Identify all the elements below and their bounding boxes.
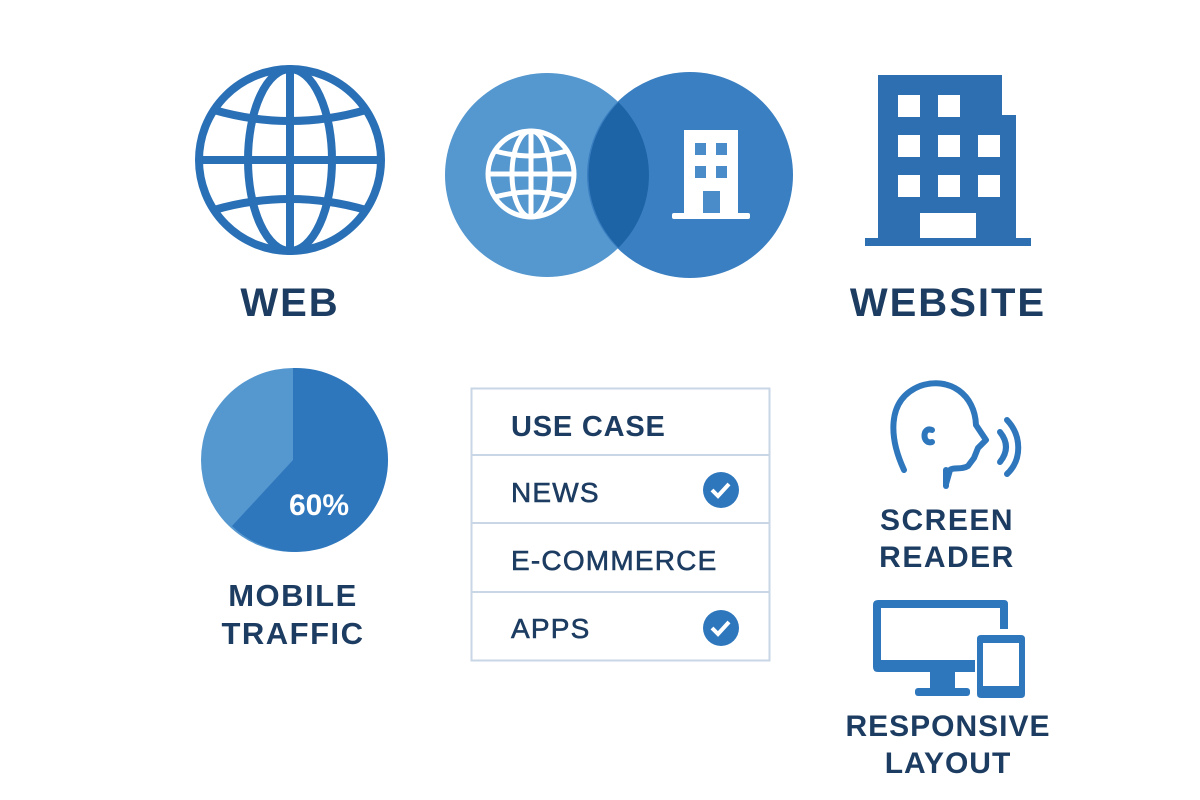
icon: small building xyxy=(672,130,750,219)
icon: small globe xyxy=(488,131,574,217)
label: SCREEN READER: SCREEN xyxy=(880,504,1014,537)
pie chart: 60% xyxy=(289,489,349,522)
heading: WEBSITE: WEBSITE xyxy=(850,281,1046,325)
label: MOBILE TRAFFIC: MOBILE xyxy=(228,578,358,613)
table: use cases: NEWS xyxy=(511,477,600,508)
table: use cases: APPS xyxy=(511,613,591,644)
label: MOBILE TRAFFIC: TRAFFIC xyxy=(221,616,365,651)
label: RESPONSIVE LAYOUT: LAYOUT xyxy=(885,747,1011,780)
pie chart xyxy=(201,368,388,552)
table: use cases: USE CASE xyxy=(511,411,666,443)
label: RESPONSIVE LAYOUT: RESPONSIVE xyxy=(845,710,1051,743)
icon: globe xyxy=(199,69,381,251)
heading: WEB: WEB xyxy=(240,281,340,325)
label: SCREEN READER: READER xyxy=(879,541,1015,574)
icon: check xyxy=(703,610,739,646)
table: use cases: E-COMMERCE xyxy=(511,545,717,576)
venn diagram xyxy=(445,72,793,278)
icon: building xyxy=(865,75,1031,246)
icon: screen reader head xyxy=(893,383,1018,486)
table: use cases xyxy=(471,388,770,660)
icon: responsive devices xyxy=(873,600,1025,698)
icon: check xyxy=(703,472,739,508)
